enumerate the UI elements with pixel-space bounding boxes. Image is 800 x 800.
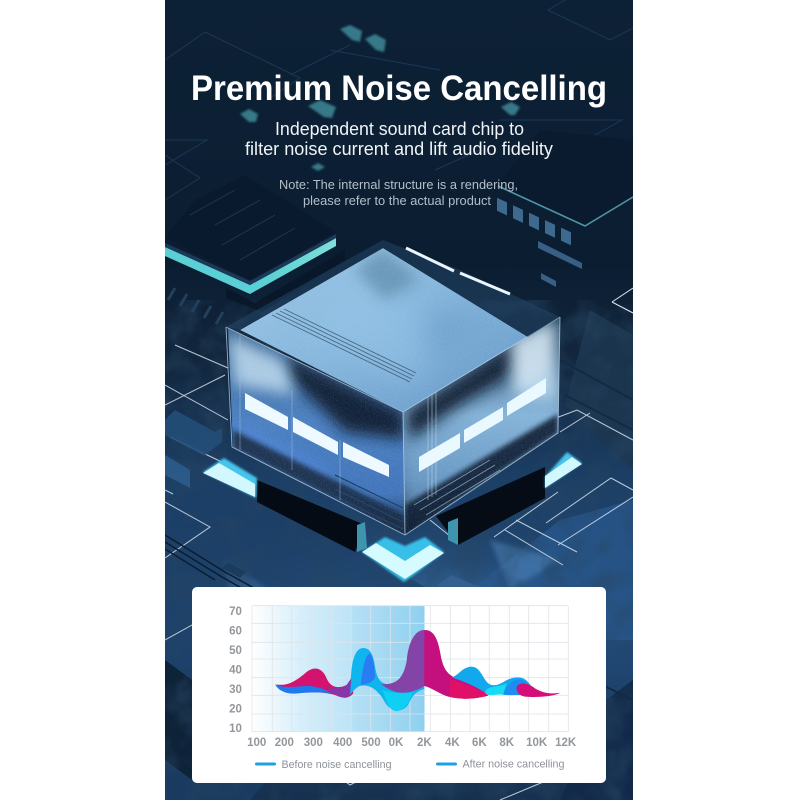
- chart curves: [275, 630, 561, 711]
- curve: cyan mid band: [349, 648, 424, 710]
- upper right chip: [497, 185, 633, 287]
- faded teal squares: [240, 25, 520, 171]
- white right outline: [612, 288, 633, 313]
- chart blue band: [252, 606, 424, 732]
- y axis labels: 20: [229, 704, 242, 716]
- curve: purple tint on dip: [327, 678, 351, 697]
- x axis labels: 8K: [499, 737, 515, 749]
- lower board plates: [165, 310, 633, 800]
- y axis labels: 30: [229, 684, 242, 696]
- x axis labels: 6K: [472, 737, 487, 749]
- x axis labels: 400: [333, 737, 352, 749]
- curve: aqua link: [485, 683, 507, 695]
- x axis labels: 300: [304, 737, 323, 749]
- left window bars: [245, 393, 389, 477]
- curve: right blue bumps: [451, 667, 535, 695]
- chart area: [229, 606, 577, 771]
- cube right face: [403, 317, 560, 535]
- x axis labels: 500: [361, 737, 381, 749]
- subtitle: filter noise current and lift audio fidelity: [245, 139, 553, 159]
- curve: blue start: [275, 684, 332, 694]
- background: circuit board: [150, 0, 650, 800]
- note: [279, 177, 518, 208]
- chart band step: [351, 606, 424, 732]
- title: Premium Noise Cancelling: [191, 69, 607, 108]
- chart card: [192, 587, 606, 783]
- white circuit traces: [165, 345, 633, 800]
- x axis labels: 10K: [526, 737, 548, 749]
- left base block: [257, 480, 365, 552]
- x axis labels: 200: [275, 737, 294, 749]
- curve: inner blue right: [503, 679, 533, 695]
- transparent chip cube: [226, 240, 562, 538]
- curve: crimson low-mid hump: [276, 669, 353, 698]
- cube left face: [228, 328, 405, 535]
- x axis labels: 0K: [389, 737, 404, 749]
- curve: magenta central peak: [382, 630, 488, 699]
- x axis labels: 4K: [445, 737, 460, 749]
- cube top face: [240, 248, 528, 412]
- curve: crimson right lobe: [449, 679, 488, 699]
- faded upper circuit traces: [165, 0, 633, 200]
- upper left chip: [165, 190, 345, 312]
- y axis labels: 10: [229, 723, 242, 735]
- y axis labels: 50: [229, 645, 242, 657]
- right base block: [436, 467, 545, 545]
- note: please refer to the actual product: [303, 193, 491, 208]
- y axis labels: 70: [229, 606, 242, 618]
- infographic poster: [165, 0, 633, 800]
- y axis labels: [229, 606, 242, 735]
- subtitle: [245, 119, 553, 159]
- x axis labels: [247, 737, 577, 749]
- note: Note: The internal structure is a rendering,: [279, 177, 518, 192]
- curve: inner blue hump: [361, 653, 375, 685]
- x axis labels: 2K: [417, 737, 432, 749]
- legend: after: After noise cancelling: [462, 758, 564, 770]
- cube outer edges: [226, 317, 560, 535]
- curve: purple tint on peak: [382, 630, 424, 693]
- chart grid: [252, 606, 568, 732]
- front glowing pad: [362, 537, 444, 582]
- left glowing pad: [203, 458, 257, 498]
- x axis labels: 12K: [555, 737, 577, 749]
- cube grain: [226, 246, 562, 538]
- y axis labels: 60: [229, 626, 242, 638]
- curve: cyan trough: [382, 690, 413, 711]
- glass rim: [226, 240, 560, 337]
- y axis labels: 40: [229, 664, 242, 676]
- x axis labels: 100: [247, 737, 266, 749]
- right glowing pad: [545, 452, 582, 488]
- legend: before: Before noise cancelling: [282, 759, 392, 771]
- board mottling: [165, 300, 633, 800]
- small board components: [165, 288, 633, 700]
- right window bars: [419, 378, 546, 472]
- curve: crimson tail: [517, 683, 561, 697]
- subtitle: Independent sound card chip to: [275, 119, 524, 139]
- rim highlights: [406, 248, 510, 294]
